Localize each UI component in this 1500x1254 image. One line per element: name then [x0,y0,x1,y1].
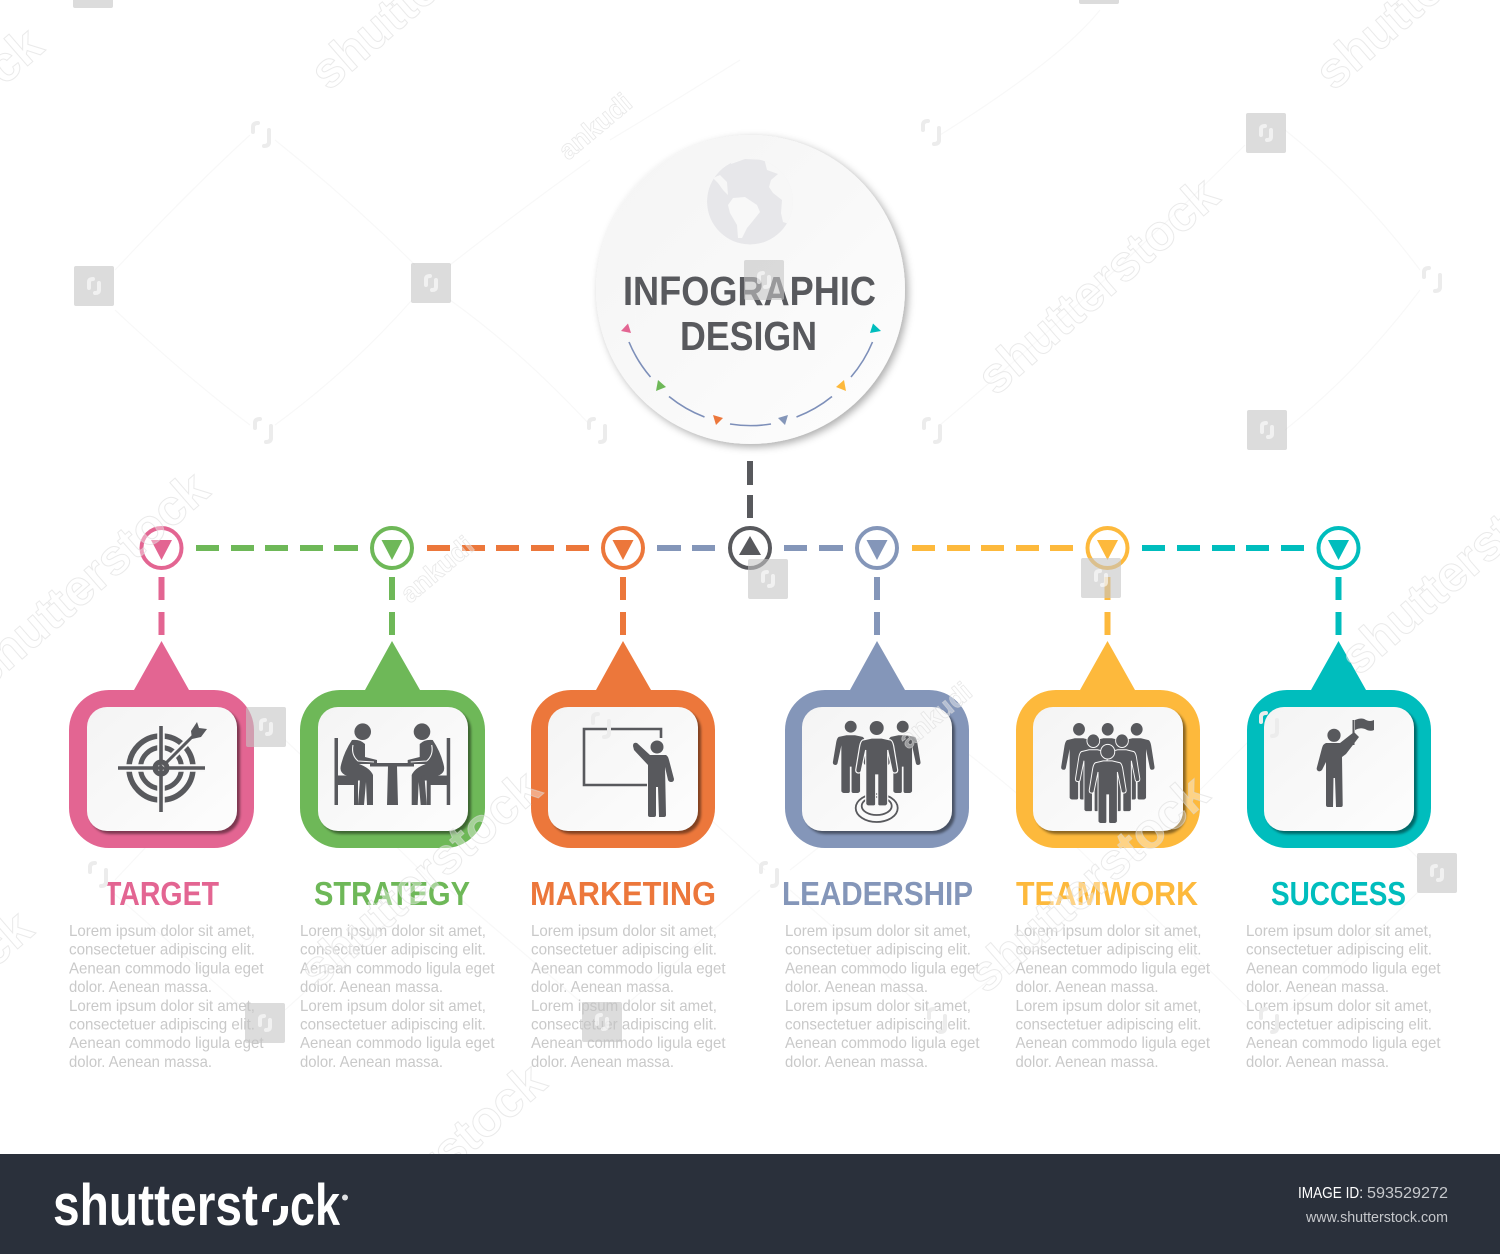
card: success [1247,641,1431,848]
watermark overlay: shutterstock [288,759,551,998]
icon: two people at a table [334,723,450,805]
text block: target: dolor. Aenean massa. [69,979,212,996]
text block: success: dolor. Aenean massa. [1246,979,1389,996]
text block: teamwork [1016,923,1211,1071]
node: target [142,528,182,568]
text block: success: Lorem ipsum dolor sit amet, [1246,923,1432,940]
shutterstock logo: ck [290,1173,341,1238]
website: www.shutterstock.com [1305,1210,1448,1226]
text block: strategy: dolor. Aenean massa. [300,1054,443,1071]
text block: teamwork: Aenean commodo ligula eget [1016,1035,1211,1052]
node: marketing [603,528,643,568]
panel: success [1246,528,1441,1071]
icon: leader with team [833,721,921,822]
shutterstock logo: shutterst [53,1173,258,1238]
text block: leadership: Aenean commodo ligula eget [785,1035,980,1052]
shutterstock logo: o [260,1173,290,1238]
card: leadership [785,641,969,848]
icon: team group [1061,723,1155,823]
text block: strategy: consectetuer adipiscing elit. [300,1016,486,1034]
text block: marketing: Aenean commodo ligula eget [531,960,726,977]
centre node [730,528,770,568]
text block: strategy [300,923,495,1071]
icon: person raising flag [1317,718,1374,807]
text block: leadership: dolor. Aenean massa. [785,979,928,996]
text block: success: Aenean commodo ligula eget [1246,960,1441,977]
connector: centre vertical dashes [747,461,753,518]
text block: marketing: Lorem ipsum dolor sit amet, [531,998,717,1015]
card: target [69,641,254,848]
text block: marketing [531,923,726,1071]
text block: strategy: Aenean commodo ligula eget [300,1035,495,1052]
text block: strategy: Aenean commodo ligula eget [300,960,495,977]
connector: horizontal dashes [196,545,1304,551]
text block: teamwork: consectetuer adipiscing elit. [1016,942,1202,959]
text block: success: consectetuer adipiscing elit. [1246,942,1432,959]
text block: success: Aenean commodo ligula eget [1246,1035,1441,1052]
text block: strategy: dolor. Aenean massa. [300,979,443,996]
text block: marketing: Aenean commodo ligula eget [531,1035,726,1052]
heading: teamwork: TEAMWORK [1016,875,1198,912]
text block: teamwork: dolor. Aenean massa. [1016,979,1158,996]
icon: presenter at board [584,729,674,817]
panel: teamwork [1016,528,1211,1071]
text block: teamwork: Aenean commodo ligula eget [1016,960,1211,977]
text block: target: Lorem ipsum dolor sit amet, [69,923,255,940]
icon: target with arrow [118,722,207,812]
watermark overlay: ankudi [893,676,978,755]
image id: IMAGE ID: [1298,1185,1363,1202]
text block: target: Lorem ipsum dolor sit amet, [69,998,255,1015]
text block: leadership: consectetuer adipiscing elit. [785,1016,971,1034]
text block: target: Aenean commodo ligula eget [69,960,264,977]
text block: teamwork: dolor. Aenean massa. [1016,1054,1158,1071]
text block: teamwork: Lorem ipsum dolor sit amet, [1016,998,1202,1015]
card: strategy [300,641,485,848]
central title: INFOGRAPHIC [623,268,876,314]
node: teamwork [1088,528,1128,568]
text block: strategy: Lorem ipsum dolor sit amet, [300,998,486,1015]
text block: marketing: consectetuer adipiscing elit. [531,942,717,959]
text block: marketing: dolor. Aenean massa. [531,979,674,996]
image id number: 593529272 [1367,1185,1448,1202]
text block: leadership: Lorem ipsum dolor sit amet, [785,923,971,940]
text block: teamwork: consectetuer adipiscing elit. [1016,1016,1202,1034]
heading: target: TARGET [104,875,219,912]
text block: teamwork: Lorem ipsum dolor sit amet, [1016,923,1202,940]
text block: success: dolor. Aenean massa. [1246,1054,1389,1071]
node: success [1318,528,1358,568]
text block: success: Lorem ipsum dolor sit amet, [1246,998,1432,1015]
central subtitle: DESIGN [680,313,817,359]
heading: success: SUCCESS [1271,875,1406,912]
text block: leadership: Aenean commodo ligula eget [785,960,980,977]
text block: target: consectetuer adipiscing elit. [69,942,255,959]
card: teamwork [1016,641,1200,848]
text block: strategy: consectetuer adipiscing elit. [300,942,486,959]
text block: success [1246,923,1441,1071]
central circle: infographic design [596,135,905,444]
text block: target [69,923,264,1071]
text block: success: consectetuer adipiscing elit. [1246,1016,1432,1034]
text block: target: dolor. Aenean massa. [69,1054,212,1071]
footer bar [0,1154,1500,1254]
watermark overlay: ankudi [395,530,480,609]
text block: strategy: Lorem ipsum dolor sit amet, [300,923,486,940]
icon: globe [707,159,787,244]
text block: marketing: Lorem ipsum dolor sit amet, [531,923,717,940]
text block: target: consectetuer adipiscing elit. [69,1016,255,1034]
watermark overlay: shutterstock [956,764,1219,1003]
node: strategy [372,528,412,568]
heading: strategy: STRATEGY [314,875,470,912]
arc of dashes with coloured arrows [621,324,881,426]
text block: leadership: consectetuer adipiscing elit. [785,942,971,959]
heading: leadership: LEADERSHIP [782,875,973,912]
heading: marketing: MARKETING [530,875,716,912]
text block: leadership: dolor. Aenean massa. [785,1054,928,1071]
panel: target [69,528,264,1071]
text block: marketing: dolor. Aenean massa. [531,1054,674,1071]
text block: marketing: consectetuer adipiscing elit. [531,1016,717,1034]
panel: leadership [782,528,980,1071]
text block: leadership [785,923,980,1071]
node: leadership [857,528,897,568]
panel: strategy [300,528,495,1071]
watermark overlay: shutterstock [966,166,1229,405]
watermark overlay: ankudi [553,87,638,166]
text block: target: Aenean commodo ligula eget [69,1035,264,1052]
card: marketing [531,641,715,848]
text block: leadership: Lorem ipsum dolor sit amet, [785,998,971,1015]
panel: marketing [530,528,726,1071]
